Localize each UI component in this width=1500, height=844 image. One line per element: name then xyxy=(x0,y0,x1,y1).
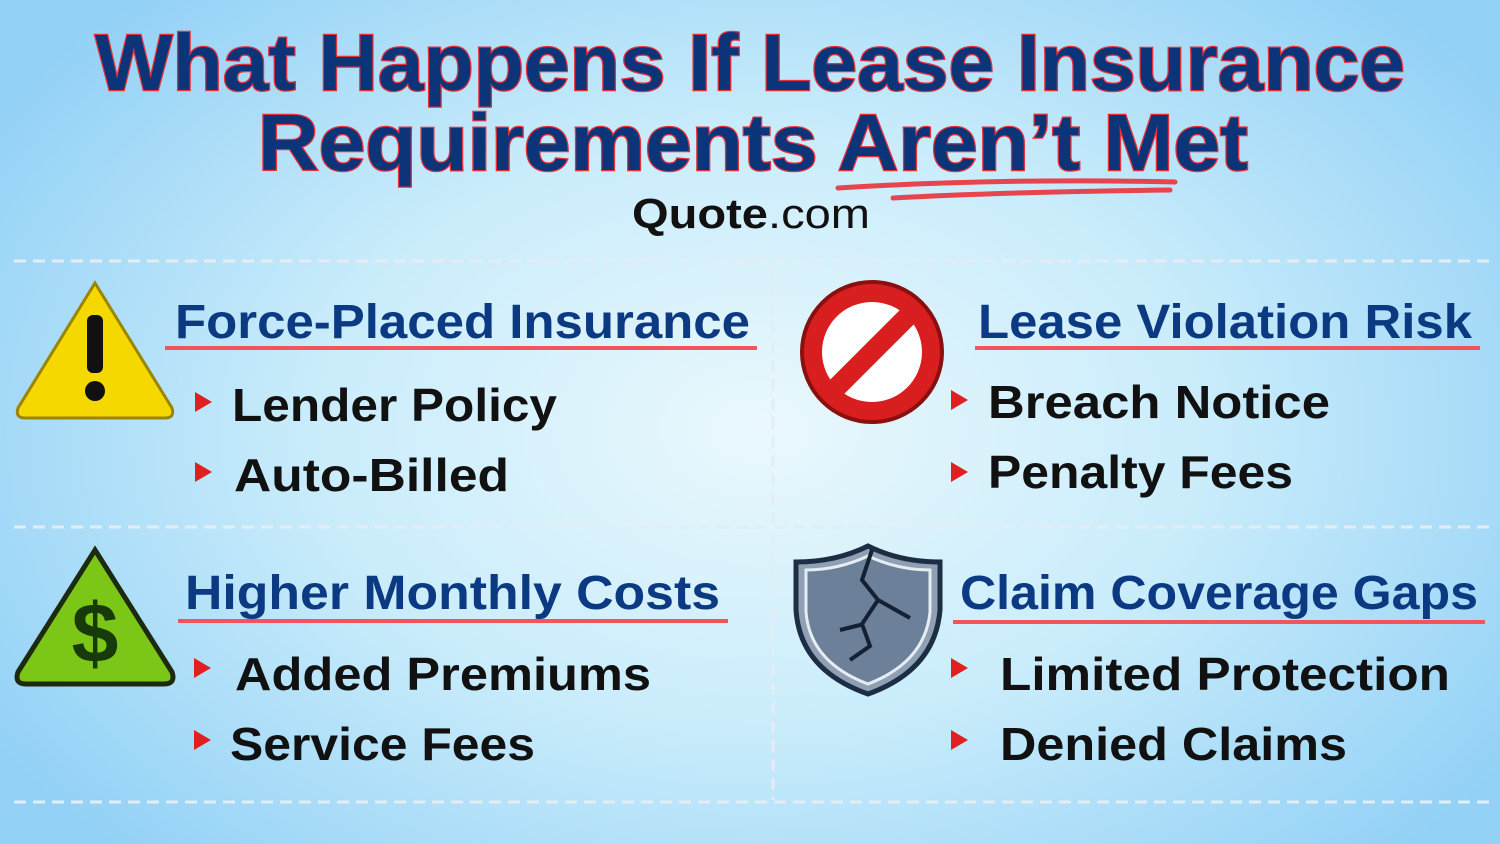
title: What Happens If Lease Insurance xyxy=(95,18,1405,107)
panel: lease violation risk: Penalty Fees xyxy=(988,446,1293,498)
title underline swoosh xyxy=(838,181,1175,198)
icon: prohibited xyxy=(802,282,942,422)
panel: higher monthly costs: Added Premiums xyxy=(235,648,651,700)
title xyxy=(95,18,1405,187)
heading: Higher Monthly Costs xyxy=(185,567,720,620)
bullets xyxy=(195,392,212,482)
brand: Quote.com: Quote .com xyxy=(632,190,870,237)
panel: force-placed insurance xyxy=(17,283,757,501)
icon: warning xyxy=(17,283,173,418)
heading: Lease Violation Risk xyxy=(978,296,1472,349)
panel: claim coverage gaps: Denied Claims xyxy=(1000,718,1347,770)
panel: higher monthly costs xyxy=(17,550,728,770)
icon: dollar triangle: $ xyxy=(72,586,118,680)
panel: higher monthly costs: Service Fees xyxy=(230,718,535,770)
panel: claim coverage gaps: Limited Protection xyxy=(1000,648,1450,700)
title: Requirements Aren’t Met xyxy=(258,98,1248,187)
panel: force-placed insurance: Lender Policy xyxy=(232,379,557,431)
icon: dollar triangle xyxy=(17,550,173,684)
panel: lease violation risk: Breach Notice xyxy=(988,376,1330,428)
heading: Claim Coverage Gaps xyxy=(960,567,1478,620)
panel: claim coverage gaps xyxy=(796,546,1485,770)
heading: Force-Placed Insurance xyxy=(175,296,750,349)
panel: force-placed insurance: Auto-Billed xyxy=(234,449,509,501)
panel: lease violation risk xyxy=(802,282,1480,498)
icon: cracked shield xyxy=(796,546,940,694)
